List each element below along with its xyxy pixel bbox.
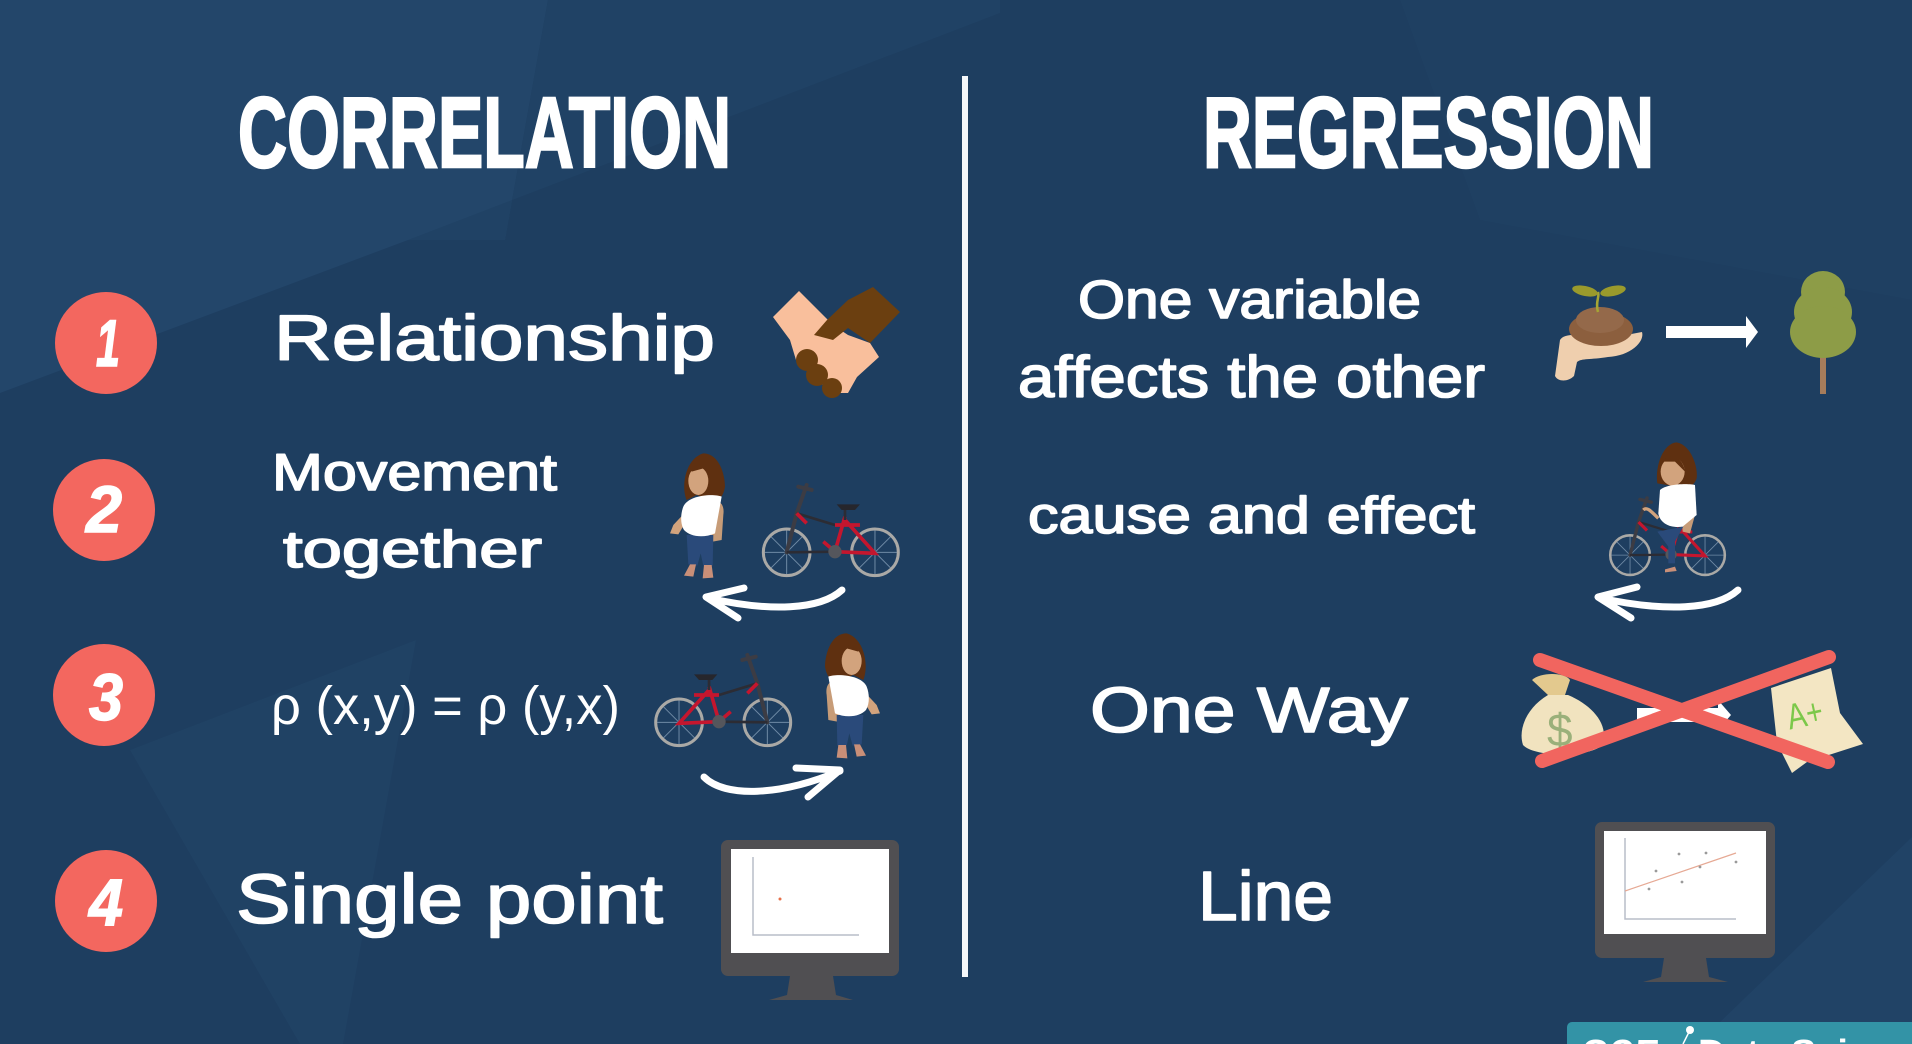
icon: money bag [1522,674,1604,756]
icon: money bag: $ [1547,704,1573,756]
icon: woman mirrored [825,633,880,758]
icon: hand holding sprout [1555,283,1642,380]
arrow: curved left under bicycle [1598,587,1738,618]
arrow: curved left [706,588,842,618]
logo badge [1567,1022,1912,1044]
text: rho formula: ρ (x,y) = ρ (y,x) [271,676,620,736]
heading: correlation: CORRELATION [238,77,731,189]
text: cause and effect: cause and effect [1028,487,1476,545]
text: single point: Single point [236,860,663,938]
row 3 number badge [53,644,155,746]
icon: bicycle [763,485,899,576]
row 2 number badge [53,459,155,561]
icon: crossed out money to grade [1522,657,1863,773]
text: relationship: Relationship [274,302,715,374]
text: movement together [272,444,558,579]
text: line: Line [1198,857,1333,935]
text: one variable affects the other: affects the other [1018,345,1485,410]
arrow: straight right [1666,316,1758,348]
row 3 number badge: 3 [89,660,123,734]
icon: graded paper: A+ [1783,690,1827,737]
row 4 number badge [55,850,157,952]
icon: handshake [773,287,900,398]
cross out mark [1540,657,1829,762]
arrow: curved right [704,768,840,797]
icon: monitor with regression line [1595,822,1775,982]
divider line [962,76,968,977]
text: one variable affects the other [1018,270,1485,410]
text: movement together: Movement [272,444,558,502]
icon: graded paper [1771,668,1863,773]
text: one way: One Way [1090,674,1408,746]
heading: regression: REGRESSION [1203,77,1654,189]
icon: bicycle mirrored [655,655,791,746]
row 1 number badge [55,292,157,394]
row 4 number badge: 4 [87,865,123,939]
arrow: straight right behind cross [1637,700,1731,730]
icon: woman riding bicycle [1610,442,1725,576]
icon: tree [1790,271,1856,394]
row 1 number badge: 1 [96,306,120,380]
text: one variable affects the other: One variable [1078,270,1421,330]
text: movement together: together [283,521,542,579]
icon: monitor with single point [721,840,899,1000]
icon: woman standing [670,453,725,578]
row 2 number badge: 2 [84,472,122,546]
